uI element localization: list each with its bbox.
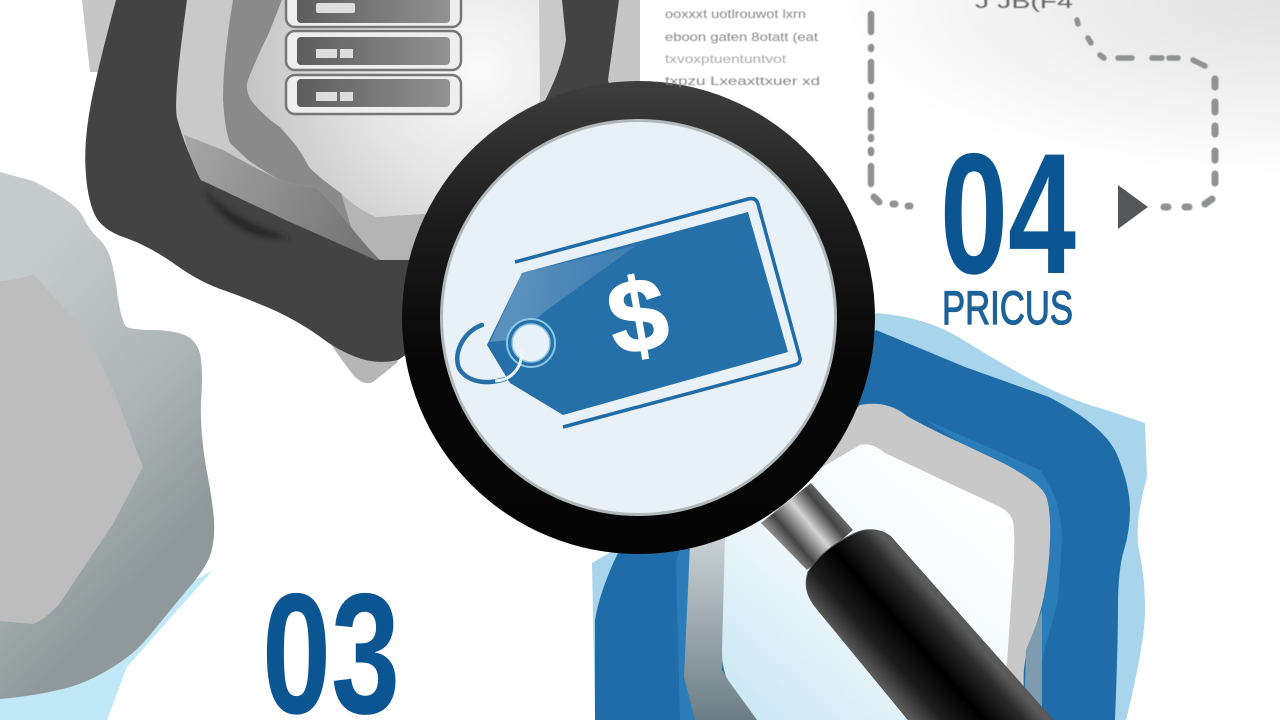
dark shield layer	[85, 0, 640, 362]
string loop	[457, 325, 505, 382]
text block: blurred copy: txvoxptuentuntvot	[665, 52, 787, 66]
grey blob body	[0, 172, 214, 699]
panel: left grey blob	[0, 172, 214, 720]
lighter lower wedge	[341, 193, 440, 260]
light blue blob shadow	[0, 570, 213, 720]
lens glass	[442, 120, 836, 514]
inner gradient panel	[247, 0, 540, 217]
string highlight	[495, 350, 522, 381]
tag highlight	[490, 245, 637, 342]
grey inner band	[223, 0, 440, 260]
text block: blurred copy	[665, 7, 820, 88]
medium lower band	[184, 135, 380, 260]
number 04: 04	[940, 118, 1076, 310]
handle grip	[806, 530, 1060, 720]
handle neck	[761, 483, 853, 570]
server row 2	[286, 31, 461, 70]
tag hole ring	[507, 319, 555, 367]
white inner panel	[722, 444, 1014, 720]
label: PRICUS: PRICUS	[942, 281, 1073, 334]
left grey band	[684, 500, 757, 720]
dashed connector	[871, 14, 1215, 207]
icon: server stack	[286, 0, 461, 114]
dark blue layer	[595, 330, 1130, 720]
grey blue lower band	[1024, 610, 1042, 720]
grey band	[700, 404, 1050, 720]
light blue outer layer	[592, 313, 1147, 720]
server row 1	[286, 0, 461, 27]
panel: server shield	[82, 0, 640, 383]
text block: blurred copy: txpzu Lxeaxttxuer xd	[665, 74, 820, 88]
light band	[176, 0, 566, 260]
panel: blue frame	[592, 313, 1147, 720]
lighter inner facet	[0, 274, 143, 624]
tag outline	[515, 199, 800, 427]
server row 3	[286, 75, 461, 114]
light outer shield layers	[82, 0, 640, 383]
brighter blue band	[676, 420, 1062, 720]
dollar sign: $	[599, 254, 676, 379]
lens ring	[402, 81, 875, 554]
tag body	[487, 212, 788, 415]
top right grey wash	[800, 0, 1280, 200]
arrow	[1118, 185, 1148, 229]
text block: blurred copy: ooxxxt uotlrouwot lxrn	[665, 7, 806, 21]
text block: blurred copy: eboon gaten 8otatt (eat	[665, 30, 819, 44]
shield darker shade	[205, 190, 290, 239]
icon: price tag	[457, 199, 800, 427]
icon: magnifying glass	[402, 81, 1060, 720]
tag hole	[512, 324, 550, 362]
